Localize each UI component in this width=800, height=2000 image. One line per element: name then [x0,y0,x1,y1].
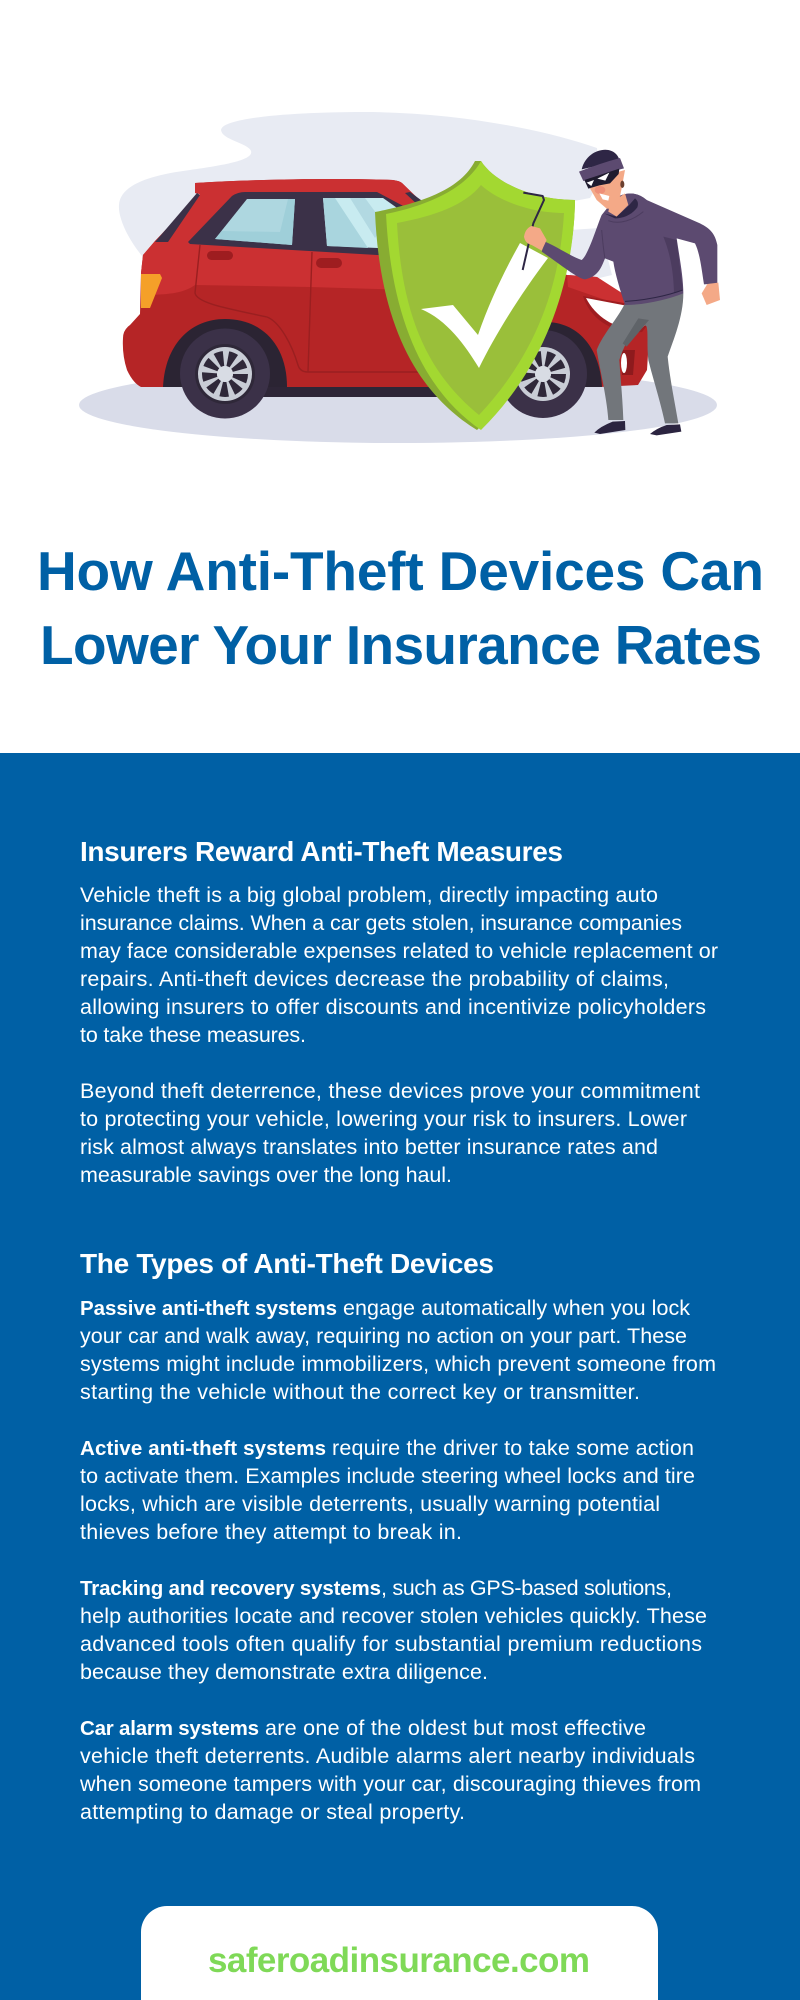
website url: saferoadinsurance.com [208,1941,590,1980]
text block: lower risk paragraph: risk almost always translates into better insurance rates and [80,1135,658,1159]
text block: alarm systems: Car alarm systems [80,1717,259,1740]
front window [323,198,400,248]
thief [523,150,720,435]
text block: active systems [80,1436,695,1544]
red car [123,179,650,418]
text block: theft problem paragraph [80,883,718,1047]
text block: alarm systems: attempting to damage or steal property. [80,1800,465,1824]
text block: lower risk paragraph [80,1079,700,1187]
free hand [702,283,720,305]
website card [141,1906,658,2000]
head [588,170,625,209]
tail light [141,274,162,308]
front wheel arch [490,322,602,387]
text block: theft problem paragraph: allowing insurers to offer discounts and incentivize policyholders [80,995,706,1019]
text block: theft problem paragraph: may face considerable expenses related to vehicle replacement or [80,939,718,963]
text block: theft problem paragraph: Vehicle theft is a big global problem, directly impacting auto [80,883,658,907]
neck [608,193,628,217]
door handles [207,251,342,268]
hand with crowbar [524,226,547,251]
text block: tracking systems: Tracking and recovery systems [80,1577,381,1600]
title: Lower Your Insurance Rates [40,614,762,676]
text block: alarm systems [79,1716,701,1824]
heading: types of devices: The Types of Anti-Theft Devices [80,1248,494,1279]
text block: theft problem paragraph: insurance claims. When a car gets stolen, insurance companies [80,911,682,935]
text block: active systems: to activate them. Examples include steering wheel locks and tire [80,1464,695,1488]
text block: alarm systems: vehicle theft deterrents. Audible alarms alert nearby individuals [80,1744,695,1768]
rear wheel [180,328,270,418]
text block: active systems: Active anti-theft systems [80,1437,326,1460]
text block: passive systems: your car and walk away, requiring no action on your part. These [80,1324,687,1348]
text block: lower risk paragraph: to protecting your vehicle, lowering your risk to insurers. Lower [80,1107,687,1131]
rear window [215,199,295,245]
rear wheel arch [163,319,287,387]
background cloud blob [119,112,612,300]
mouth [599,193,609,201]
headlight [583,296,650,332]
hoodie [542,194,717,305]
text block: tracking systems: help authorities locate and recover stolen vehicles quickly. These [80,1604,707,1628]
text block: passive systems: Passive anti-theft systems [80,1297,337,1320]
text block: tracking systems [80,1576,707,1684]
text block: active systems: thieves before they attempt to break in. [80,1520,462,1544]
underbody [250,387,550,397]
illustration: car protected by shield with thief [79,112,720,443]
beanie hat [582,150,619,169]
heading: insurers reward: Insurers Reward Anti-Theft Measures [80,836,563,867]
text block: tracking systems: , such as GPS-based solutions, [381,1576,672,1600]
hood collar [604,198,638,218]
text block: passive systems [80,1296,716,1404]
window frame [188,192,430,258]
text block: passive systems: engage automatically when you lock [343,1296,690,1320]
eye mask [584,169,619,189]
trousers [597,293,683,423]
text block: tracking systems: because they demonstrate extra diligence. [80,1660,488,1684]
front grille [621,350,635,375]
text block: theft problem paragraph: repairs. Anti-theft devices decrease the probability of claims, [80,967,669,991]
front wheel [499,330,587,418]
shoes [594,421,681,435]
title: How Anti-Theft Devices Can [37,540,764,602]
check mark [421,243,548,368]
text block: tracking systems: advanced tools often qualify for substantial premium reductions [80,1632,702,1656]
title [37,540,764,676]
text block: lower risk paragraph: Beyond theft deterrence, these devices prove your commitment [80,1079,700,1103]
text block: theft problem paragraph: to take these measures. [80,1023,306,1047]
text block: passive systems: systems might include immobilizers, which prevent someone from [80,1352,716,1376]
green shield with check mark [375,161,575,430]
crowbar [523,193,544,270]
text block: active systems: locks, which are visible deterrents, usually warning potential [80,1492,660,1516]
text block: active systems: require the driver to take some action [332,1436,694,1460]
text block: alarm systems: are one of the oldest but most effective [265,1716,646,1740]
door seams [195,245,440,372]
ground shadow [79,367,717,443]
panel: blue content background [0,753,800,2000]
text block: lower risk paragraph: measurable savings over the long haul. [80,1163,452,1187]
text block: alarm systems: when someone tampers with your car, discouraging thieves from [79,1772,701,1796]
back pillar strip [155,193,200,242]
text block: passive systems: starting the vehicle without the correct key or transmitter. [80,1380,640,1404]
